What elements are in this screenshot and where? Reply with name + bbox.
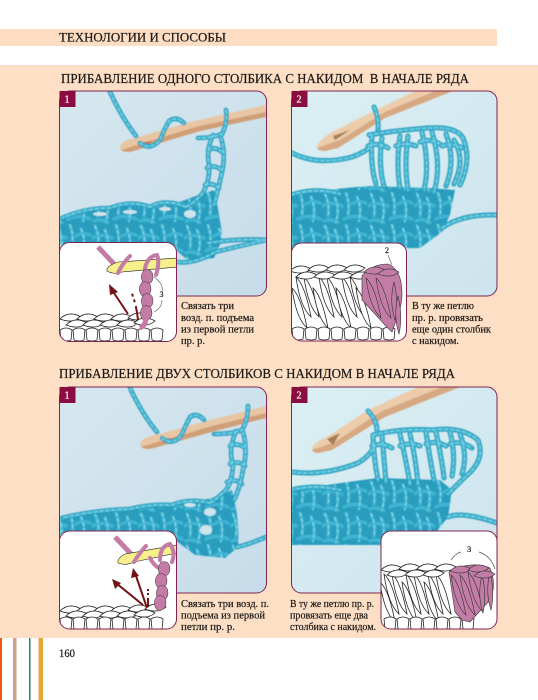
inset diagram 2: [290, 243, 406, 341]
caption 3: петли пр. р.: [181, 621, 235, 633]
number badge: [60, 91, 76, 107]
number badge: 1: [64, 94, 70, 106]
crochet fabric: [291, 478, 452, 545]
panel: step 2 top: [291, 91, 497, 296]
caption 1: возд. п. подъема: [181, 312, 254, 324]
hook photo: [120, 105, 266, 152]
inset diagram 2: 2: [385, 246, 389, 255]
hook photo: [140, 406, 266, 449]
panel: step 1 bottom: [59, 387, 267, 593]
caption 2: В ту же петлю: [412, 300, 474, 312]
inset diagram 4: 3: [467, 544, 471, 554]
hook photo: [316, 92, 434, 148]
inset diagram 1: 3: [160, 290, 164, 299]
crochet fabric: [60, 490, 238, 558]
page number: 160: [59, 648, 75, 660]
inset diagram 1: [60, 242, 177, 342]
caption 3: [181, 598, 269, 633]
header band: [0, 29, 497, 46]
crochet fabric: [60, 190, 222, 262]
caption 3: Связать три возд. п.: [181, 598, 269, 610]
number badge: 2: [296, 94, 302, 106]
caption 3: подъема из первой: [181, 610, 265, 622]
crochet fabric: [291, 186, 455, 250]
caption 1: из первой петли: [181, 324, 254, 336]
caption 4: В ту же петлю пр. р.: [290, 598, 374, 610]
caption 4: [290, 598, 376, 633]
caption 1: [181, 300, 254, 347]
heading: two stitches: ПРИБАВЛЕНИЕ ДВУХ СТОЛБИКОВ С НАКИДОМ В НАЧАЛЕ РЯДА: [59, 367, 456, 382]
inset diagram 3: [60, 531, 177, 630]
number badge: 1: [64, 390, 70, 402]
heading: one stitch: ПРИБАВЛЕНИЕ ОДНОГО СТОЛБИКА С НАКИДОМ В НАЧАЛЕ РЯДА: [61, 72, 470, 87]
caption 2: пр. р. провязать: [412, 312, 483, 324]
caption 2: с накидом.: [412, 335, 459, 347]
number badge: [292, 91, 308, 107]
caption 1: пр. р.: [181, 335, 205, 347]
number badge: [292, 387, 308, 403]
inset diagram 4: [380, 531, 497, 630]
caption 1: Связать три: [181, 300, 234, 312]
caption 2: еще один столбик: [412, 324, 492, 336]
caption 4: столбика с накидом.: [290, 621, 376, 633]
caption 2: [412, 300, 492, 347]
caption 4: провязать еще два: [290, 610, 368, 622]
panel: step 2 bottom: [291, 387, 497, 593]
decorative yarn strands: [0, 638, 43, 700]
header title: ТЕХНОЛОГИИ И СПОСОБЫ: [59, 30, 226, 44]
panel: step 1 top: [59, 91, 267, 296]
hook photo: [312, 388, 442, 450]
number badge: 2: [296, 390, 302, 402]
number badge: [60, 387, 76, 403]
